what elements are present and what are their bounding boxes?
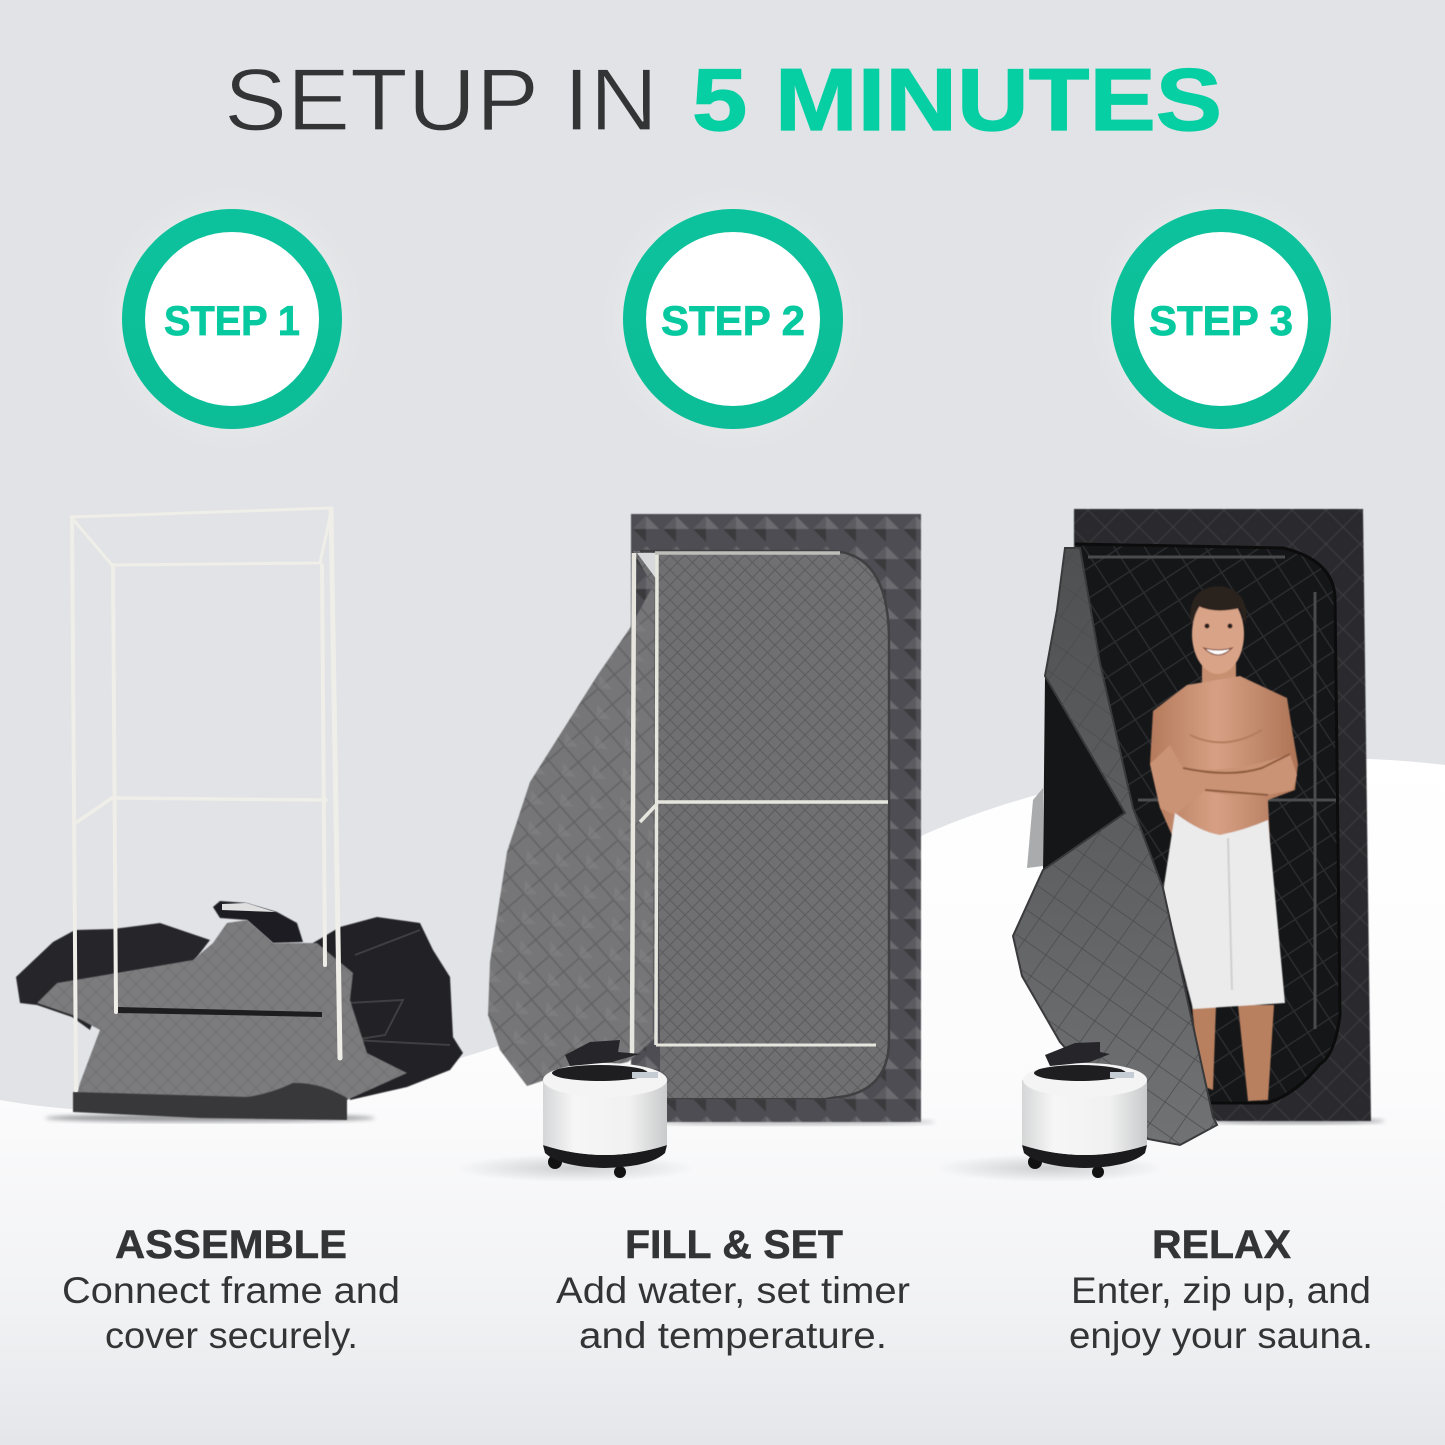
tent opening <box>1075 544 1340 1103</box>
caption: fill and set: Add water, set timer <box>556 1270 910 1311</box>
white wave <box>0 758 1445 1445</box>
step badge 1: STEP 1 <box>164 297 300 344</box>
step badge 2 <box>601 187 865 451</box>
face <box>1192 594 1244 674</box>
caption: relax <box>1069 1223 1373 1356</box>
outer tent <box>1074 509 1371 1121</box>
steamer <box>935 1042 1165 1182</box>
title <box>224 50 1222 149</box>
slot <box>118 1007 322 1017</box>
hair <box>1190 586 1246 625</box>
smile <box>1204 648 1232 655</box>
gray quilted pile <box>37 920 407 1100</box>
caption: relax: enjoy your sauna. <box>1069 1315 1373 1356</box>
crossed arms <box>1150 745 1297 815</box>
quilted outer border <box>631 514 921 1122</box>
open flap <box>488 582 655 1086</box>
caption: fill and set: FILL & SET <box>625 1223 843 1267</box>
caption: assemble: Connect frame and <box>62 1270 400 1311</box>
zip flap top <box>213 901 303 943</box>
caption: assemble <box>62 1223 400 1356</box>
dark side <box>1043 676 1125 870</box>
torso <box>1150 676 1298 842</box>
man <box>1150 586 1298 1101</box>
caption: fill and set <box>556 1223 910 1356</box>
towel <box>1163 813 1285 1009</box>
gap at top of pole <box>637 553 657 580</box>
title: 5 MINUTES <box>692 50 1222 149</box>
step badge 3: STEP 3 <box>1149 297 1293 344</box>
neck <box>1202 660 1236 692</box>
silver lining <box>1027 788 1043 868</box>
inner poles <box>1088 557 1336 1029</box>
black cover right <box>313 917 463 1100</box>
caption: fill and set: and temperature. <box>579 1315 887 1356</box>
flap <box>1013 548 1217 1145</box>
legs <box>1192 1005 1216 1090</box>
caption: assemble: cover securely. <box>105 1315 358 1356</box>
caption: assemble: ASSEMBLE <box>115 1223 347 1267</box>
floor panel <box>660 1045 875 1098</box>
black cover left <box>16 923 210 1030</box>
illustration: frame and folded cover <box>16 508 463 1122</box>
steamer <box>455 1040 695 1182</box>
pole lines <box>632 553 888 1056</box>
caption: relax: Enter, zip up, and <box>1071 1270 1371 1311</box>
flap quilting <box>1013 548 1217 1145</box>
caption: relax: RELAX <box>1152 1223 1291 1267</box>
base band <box>73 1083 347 1120</box>
step badge 1 <box>100 187 364 451</box>
title: SETUP IN <box>224 50 658 149</box>
illustration: tent with steamer <box>455 514 935 1182</box>
illustration: man in sauna with steamer <box>935 509 1385 1182</box>
white frame poles <box>71 508 340 1090</box>
step badge 2: STEP 2 <box>661 297 805 344</box>
step badge 3 <box>1089 187 1353 451</box>
inner panel <box>633 551 889 1098</box>
